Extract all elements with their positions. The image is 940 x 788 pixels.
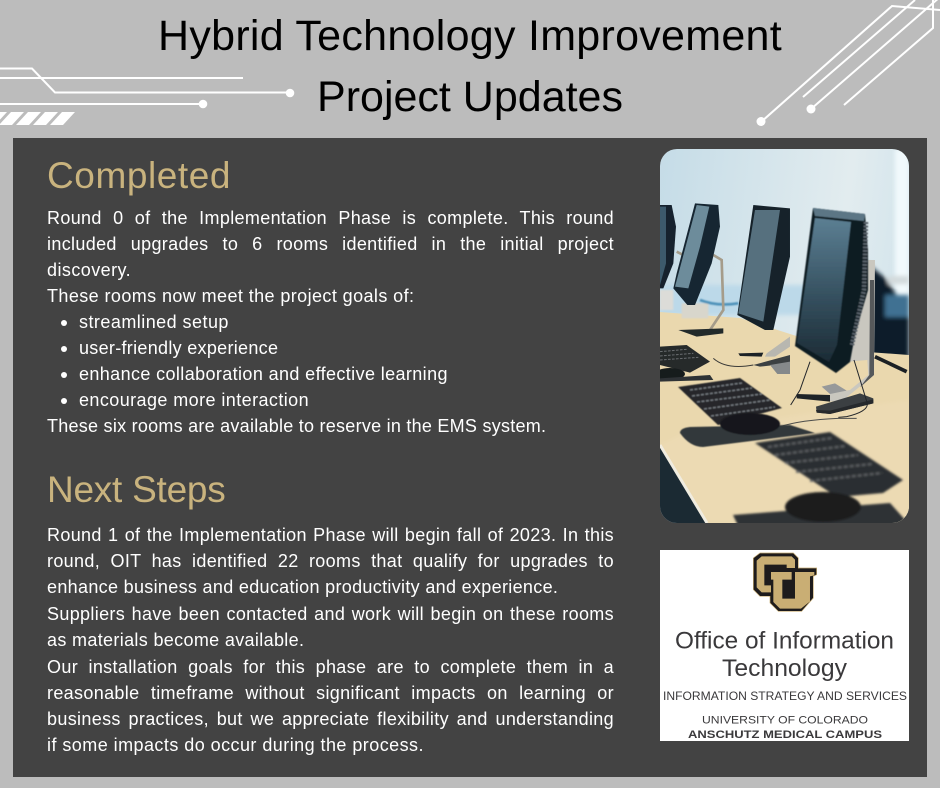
panel: dark content background — [13, 138, 927, 777]
paragraph: round 0 intro: discovery. — [47, 260, 131, 280]
logo text: ANSCHUTZ MEDICAL CAMPUS — [688, 729, 882, 741]
paragraph: round 1 — [47, 525, 614, 597]
logo text: Office of Information — [675, 628, 894, 654]
bullet list: project goals — [61, 312, 448, 410]
bullet list: project goals: enhance collaboration and effective learning — [79, 364, 448, 384]
icon: interlocking CU mark — [753, 553, 817, 611]
sentence: project goals lead-in: These rooms now meet the project goals of: — [47, 286, 414, 306]
title — [158, 12, 782, 121]
text block: completed — [47, 155, 614, 436]
heading: next steps: Next Steps — [47, 469, 225, 510]
logo card: Office of Information Technology — [660, 550, 909, 741]
heading: completed: Completed — [47, 155, 231, 196]
bullet list: project goals: encourage more interaction — [79, 390, 309, 410]
paragraph: round 1: Round 1 of the Implementation Phase will begin fall of 2023. In this — [47, 525, 614, 545]
paragraph: round 0 intro — [47, 208, 614, 280]
paragraph: round 0 intro: included upgrades to 6 rooms identified in the initial project — [47, 234, 614, 254]
title: Hybrid Technology Improvement — [158, 12, 782, 60]
blurred foreground keyboard and mouse — [733, 432, 907, 530]
title: Project Updates — [317, 73, 623, 121]
wall lower blue tint and dark chair — [661, 262, 909, 355]
mouse mat and mouse — [680, 413, 815, 447]
paragraph: round 1: enhance business and education productivity and experience. — [47, 577, 558, 597]
bullet list: project goals: streamlined setup — [79, 312, 229, 332]
paragraph: installation goals — [47, 657, 614, 755]
sentence: reservation note: These six rooms are available to reserve in the EMS system. — [47, 416, 546, 436]
paragraph: suppliers — [47, 604, 614, 650]
paragraph: installation goals: business practices, but we appreciate flexibility and understanding — [47, 709, 614, 729]
near monitor with stand — [780, 260, 907, 427]
circuit lines left — [0, 68, 294, 125]
logo text: UNIVERSITY OF COLORADO — [702, 714, 868, 726]
paragraph: installation goals: Our installation goals for this phase are to complete them in a — [47, 657, 614, 677]
paragraph: installation goals: if some impacts do occur during the process. — [47, 735, 424, 755]
logo text: INFORMATION STRATEGY AND SERVICES — [663, 689, 907, 703]
photo: computer lab desks with monitors and keyboards — [660, 149, 909, 523]
desk surface — [660, 312, 909, 523]
circuit lines right — [756, 0, 940, 126]
paragraph: suppliers: Suppliers have been contacted and work will begin on these rooms — [47, 604, 614, 624]
bullet list: project goals: user-friendly experience — [79, 338, 278, 358]
keyboard far left — [655, 345, 713, 382]
near keyboard on desk — [678, 378, 782, 425]
paragraph: round 0 intro: Round 0 of the Implementation Phase is complete. This round — [47, 208, 614, 228]
far monitors and stands — [655, 203, 790, 382]
paragraph: installation goals: reasonable timeframe without significant impacts on learning or — [47, 683, 614, 703]
text block: next steps — [47, 469, 614, 755]
paragraph: round 1: round, OIT has identified 22 rooms that qualify for upgrades to — [47, 551, 614, 571]
paragraph: suppliers: as materials become available. — [47, 630, 304, 650]
logo text: Technology — [722, 655, 847, 682]
logo text — [663, 628, 907, 741]
